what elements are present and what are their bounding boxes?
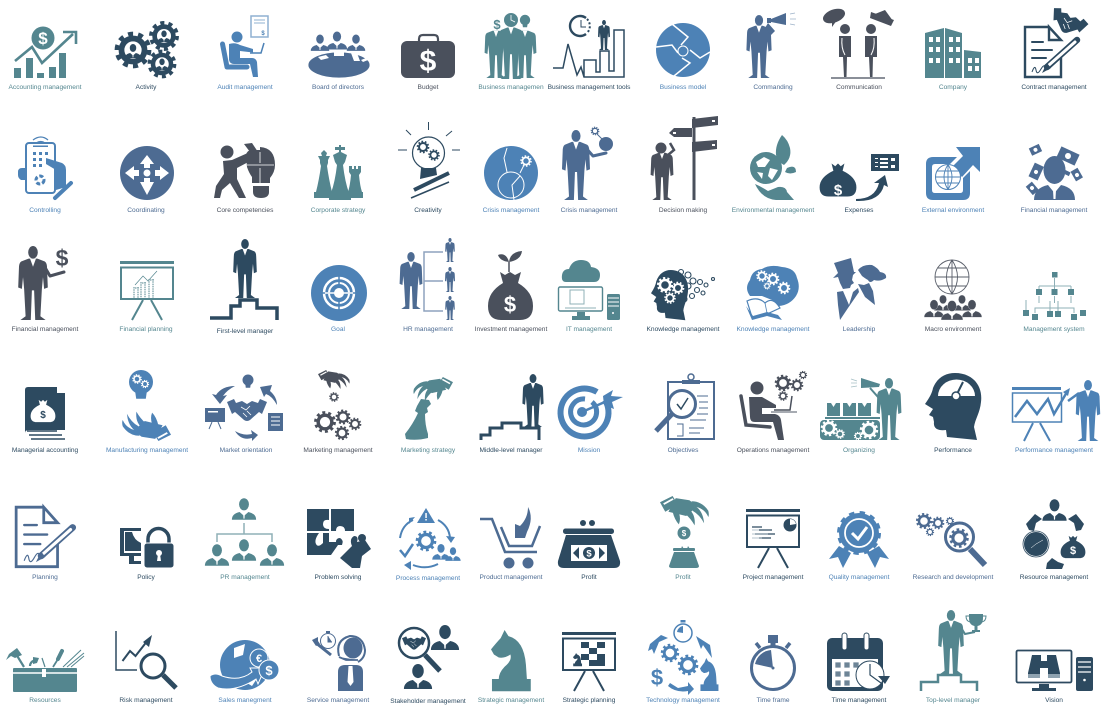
icon: stopwatch with wedge: [752, 635, 794, 690]
icon: person at laptop with invoice: $: [261, 31, 265, 37]
label: Sales manegment: [218, 697, 272, 704]
label: Performance management: [1015, 447, 1093, 454]
icon: person surrounded by banknotes: [1026, 144, 1083, 200]
label: First-level manager: [217, 328, 274, 335]
icon: purse with banknote: $: [586, 548, 592, 560]
label: Contract management: [1021, 84, 1087, 91]
icon: hand moving chess piece: [405, 377, 453, 440]
tile: Middle-level manager: [479, 374, 544, 454]
icon: seated person at laptop with gears: [741, 371, 807, 440]
icon: circle with cracked bomb: [484, 146, 538, 200]
label: Business model: [660, 84, 707, 91]
tile: Strategic planning: [562, 632, 616, 704]
tile: Research and development: [913, 514, 993, 581]
tile: Macro environment: [924, 260, 982, 333]
label: Environmental management: [732, 207, 814, 214]
icon: circle with target: [311, 265, 367, 321]
icon: jigsaw puzzle pieces: [307, 509, 371, 568]
tile: Goal: [311, 265, 367, 333]
label: Marketing management: [303, 447, 373, 454]
tile: Audit management: [217, 16, 273, 91]
tile: Communication: [821, 6, 894, 91]
icon: hand dropping coin into purse: $: [682, 529, 687, 538]
label: Strategic planning: [563, 697, 616, 704]
icon: globe with leaf on hand: [750, 135, 796, 200]
label: Middle-level manager: [479, 447, 543, 454]
icon: chess king, queen and rook: [314, 145, 363, 200]
label: Process management: [396, 575, 460, 582]
tile: Time frame: [752, 635, 794, 704]
tile: Knowledge management (head): [647, 270, 720, 333]
tile: Activity: [117, 23, 177, 91]
tile: Vision: [1016, 650, 1093, 704]
icon: briefcase with dollar: $: [420, 45, 437, 78]
label: Coordinating: [127, 207, 165, 214]
icon: magnifier with gears: [917, 514, 985, 565]
label: Profit: [675, 574, 691, 581]
tile: Top-level manager: [921, 610, 986, 704]
tile: Leadership: [833, 258, 886, 333]
tile: Operations management: [737, 371, 809, 454]
tile: Expenses: [820, 154, 899, 214]
label: Technology management: [646, 697, 720, 704]
tile: Manufacturing management: [106, 370, 188, 454]
label: Research and development: [913, 574, 993, 581]
label: Resources: [29, 697, 61, 704]
tile: Contract management: [1021, 5, 1090, 91]
tile: Commanding: [746, 13, 796, 91]
tile: Marketing management: [303, 370, 373, 454]
icon: three gears with people: [117, 23, 177, 76]
tile: Quality management: [829, 513, 890, 581]
icon: man linked to three staff: [400, 238, 455, 320]
label: Vision: [1045, 697, 1063, 704]
label: Communication: [836, 84, 882, 91]
label: Service management: [307, 697, 369, 704]
tile: Time management: [827, 633, 890, 704]
label: Business managemen: [478, 84, 544, 91]
label: Time management: [832, 697, 887, 704]
tile: Business management tools: [548, 16, 631, 91]
icon: man with megaphone: [746, 13, 796, 78]
tile: Budget: [401, 35, 455, 91]
label: Top-level manager: [926, 697, 981, 704]
label: Objectives: [668, 447, 699, 454]
tile: PR management: [205, 498, 284, 581]
tile: Mission: [561, 388, 623, 454]
label: Organizing: [843, 447, 875, 454]
icon: three men with symbols for heads: $: [493, 17, 501, 32]
tile: Financial management (man): [12, 245, 79, 333]
icon: person, clock, money bag with arrows: $: [1070, 545, 1076, 557]
tile: Product management: [479, 507, 543, 581]
label: Crisis management: [483, 207, 540, 214]
tile: Financial planning: [119, 261, 174, 333]
label: Managerial accounting: [12, 447, 78, 454]
label: Risk management: [119, 697, 173, 704]
tile: Crisis management (circle): [483, 146, 540, 214]
label: Profit: [581, 574, 597, 581]
icon: hand holding light bulb: [122, 370, 171, 441]
tile: Investment management: [475, 251, 547, 333]
icon: man on podium with trophy: [921, 610, 986, 691]
icon: monitor with padlock: [120, 528, 174, 568]
label: Accounting management: [9, 84, 82, 91]
label: Company: [939, 84, 968, 91]
label: Mission: [578, 447, 601, 454]
tile: Technology management: [646, 620, 720, 704]
icon: globe in frame with arrow: [926, 147, 980, 200]
icon: award badge with check mark: [829, 513, 889, 568]
icon: project board with pie and Gantt bars: [746, 509, 800, 568]
tile: Problem solving: [307, 509, 371, 581]
icon: man on top of stairs: [210, 239, 277, 320]
tile: Managerial accounting: [12, 387, 78, 454]
label: Planning: [32, 574, 58, 581]
icon: shopping cart with arrow: [480, 507, 540, 568]
label: Expenses: [845, 207, 874, 214]
tile: Crisis management (man): [561, 127, 618, 214]
label: Strategic management: [478, 697, 544, 704]
tile: Accounting management: [9, 26, 82, 91]
icon: circle with four arrows: [120, 146, 174, 200]
label: Time frame: [756, 697, 790, 704]
tile: Objectives: [656, 374, 714, 454]
tile: Environmental management: [732, 135, 814, 214]
icon: man on stairs: [481, 374, 544, 440]
icon: toolbox with tools: [6, 648, 84, 692]
icon: money bag, arrow and ticket: $: [834, 182, 843, 199]
icon: calendar with clock: [827, 633, 890, 691]
label: Product management: [479, 574, 543, 581]
label: Budget: [418, 84, 439, 91]
tile: Controlling: [18, 137, 71, 214]
icon: gentleman with top hat and lady silhouettes: [833, 258, 886, 320]
label: Project management: [743, 574, 804, 581]
label: Marketing strategy: [401, 447, 456, 454]
icon: people at a round table: [308, 32, 370, 78]
tile: Resource management: [1020, 499, 1088, 581]
tile: HR management: [400, 238, 455, 333]
label: Market orientation: [220, 447, 273, 454]
tile: First-level manager: [210, 239, 277, 335]
icon: monitor with binoculars and computer tower: [1016, 650, 1093, 691]
icon: man holding bomb: [562, 127, 613, 200]
label: Controlling: [29, 207, 61, 214]
icon: presenter at chart board: [1012, 380, 1100, 441]
icon: globe above group of people: [924, 260, 982, 320]
label: Activity: [136, 84, 157, 91]
tile: Performance management: [1012, 380, 1100, 454]
tile: Business management: [478, 13, 544, 91]
label: Problem solving: [315, 574, 362, 581]
label: Goal: [331, 326, 345, 333]
icon: magnifier with handshake and two people: [399, 625, 459, 689]
label: External environment: [922, 207, 984, 214]
icon: presentation board with coin stacks: [120, 261, 174, 320]
tile: Management system: [1023, 272, 1086, 333]
icon: globe, arrow and currency coins: €: [256, 653, 262, 665]
tile: Profit (purse): [558, 520, 620, 581]
label: Operations management: [737, 447, 809, 454]
label: HR management: [403, 326, 453, 333]
icon: head with gauge: [925, 373, 981, 440]
icon: cycle with warning, gear, people, check: [400, 508, 461, 570]
label: Financial management: [1021, 207, 1088, 214]
label: Financial planning: [119, 326, 173, 333]
tile: Organizing: [820, 378, 901, 454]
label: Macro environment: [925, 326, 981, 333]
tile: Planning: [16, 507, 73, 581]
label: Core competencies: [217, 207, 274, 214]
label: Business management tools: [548, 84, 631, 91]
icon: board with chess pattern and knight: [562, 632, 616, 691]
tile: Performance: [925, 373, 981, 454]
tile: Stakeholder management: [390, 625, 466, 705]
tile: Creativity: [398, 122, 460, 214]
icon: hand placing gear among gears: [316, 370, 360, 439]
label: Commanding: [753, 84, 793, 91]
label: Management system: [1023, 326, 1085, 333]
icon: globe, arrow and currency coins: $: [265, 663, 273, 678]
tile: Core competencies: [214, 143, 275, 214]
icon: cycle of arrows around handshake: [205, 374, 283, 441]
label: Corporate strategy: [311, 207, 366, 214]
tile: Profit (hand and coin): [660, 496, 709, 581]
tile: Business model: [656, 23, 710, 91]
tile: Company: [925, 28, 981, 91]
icon: person placing puzzle into bulb: [214, 143, 275, 198]
label: Financial management: [12, 326, 79, 333]
icon: clock, chart line and stepped bars with man: [553, 16, 624, 77]
icon: bar chart with coin and arrow: $: [38, 29, 48, 48]
tile: Financial management (bust with money): [1021, 144, 1088, 214]
label: Investment management: [475, 326, 547, 333]
icon: target with arrow: [561, 388, 623, 436]
icon: cloud, monitor and computer tower: [558, 260, 620, 320]
label: Resource management: [1020, 574, 1088, 581]
tile: External environment: [922, 147, 984, 214]
tile: Process management: [396, 508, 461, 582]
label: Board of directors: [312, 84, 365, 91]
tile: Decision making: [651, 116, 718, 214]
icon: money bag with sprout: $: [504, 292, 516, 317]
tile: Service management: [307, 631, 369, 704]
tile: Resources: [6, 648, 84, 704]
icon: cycle of timer, gears, dollar and knight: $: [651, 665, 663, 690]
label: Performance: [934, 447, 972, 454]
label: Knowledge management: [737, 326, 810, 333]
tile: Corporate strategy: [311, 145, 366, 214]
icon: globe, arrow and currency coins: [210, 640, 279, 690]
icon: operator with headset, wrench and stopwatch: [312, 631, 365, 691]
icon: two people with speech bubbles: [821, 6, 894, 79]
label: Decision making: [659, 207, 708, 214]
label: Stakeholder management: [390, 698, 466, 705]
tile: Policy: [120, 528, 174, 581]
tile: Marketing strategy: [401, 377, 456, 454]
label: PR management: [220, 574, 270, 581]
label: IT management: [566, 326, 612, 333]
icon: head with gears flowing out: [651, 270, 714, 320]
icon: contract, pen and handshake: [1025, 5, 1090, 77]
icon: org chart of squares: [1023, 272, 1086, 320]
label: Leadership: [843, 326, 876, 333]
icon: brain with gears and book: [746, 266, 799, 320]
icon: clipboard with magnifier: [656, 374, 714, 439]
icon: org chart of people: [205, 498, 284, 566]
icon: signed document with pen: [16, 507, 73, 567]
tile: Risk management: [116, 631, 176, 704]
tile: Market orientation: [205, 374, 283, 454]
label: Audit management: [217, 84, 273, 91]
icon: circle puzzle around bulb: [656, 23, 710, 77]
tile: Knowledge management (brain): [737, 266, 810, 333]
icon: chart with rising arrow and magnifier: [116, 631, 176, 688]
tile: Strategic management: [478, 630, 544, 704]
icon: ledger book with money bag: $: [40, 410, 46, 421]
icon: chess knight: [491, 630, 531, 691]
icon: light bulb with gears and pencils: [398, 122, 460, 198]
label: Knowledge management: [647, 326, 720, 333]
icon: conveyor belt with boxes and man with megaphone: [820, 378, 901, 440]
label: Crisis management: [561, 207, 618, 214]
tile: IT management: [558, 260, 620, 333]
tile: Coordinating: [120, 146, 174, 214]
tile: Board of directors: [308, 32, 370, 91]
label: Creativity: [414, 207, 442, 214]
tile: Project management: [743, 509, 804, 581]
tile: Sales manegment: [210, 640, 279, 704]
icon: office buildings: [925, 28, 981, 78]
icon: hand with remote control: [18, 137, 71, 198]
label: Quality management: [829, 574, 890, 581]
icon: man holding dollar sign: $: [56, 245, 69, 271]
label: Policy: [137, 574, 155, 581]
label: Manufacturing management: [106, 447, 188, 454]
icon: man looking at signpost: [651, 116, 718, 200]
